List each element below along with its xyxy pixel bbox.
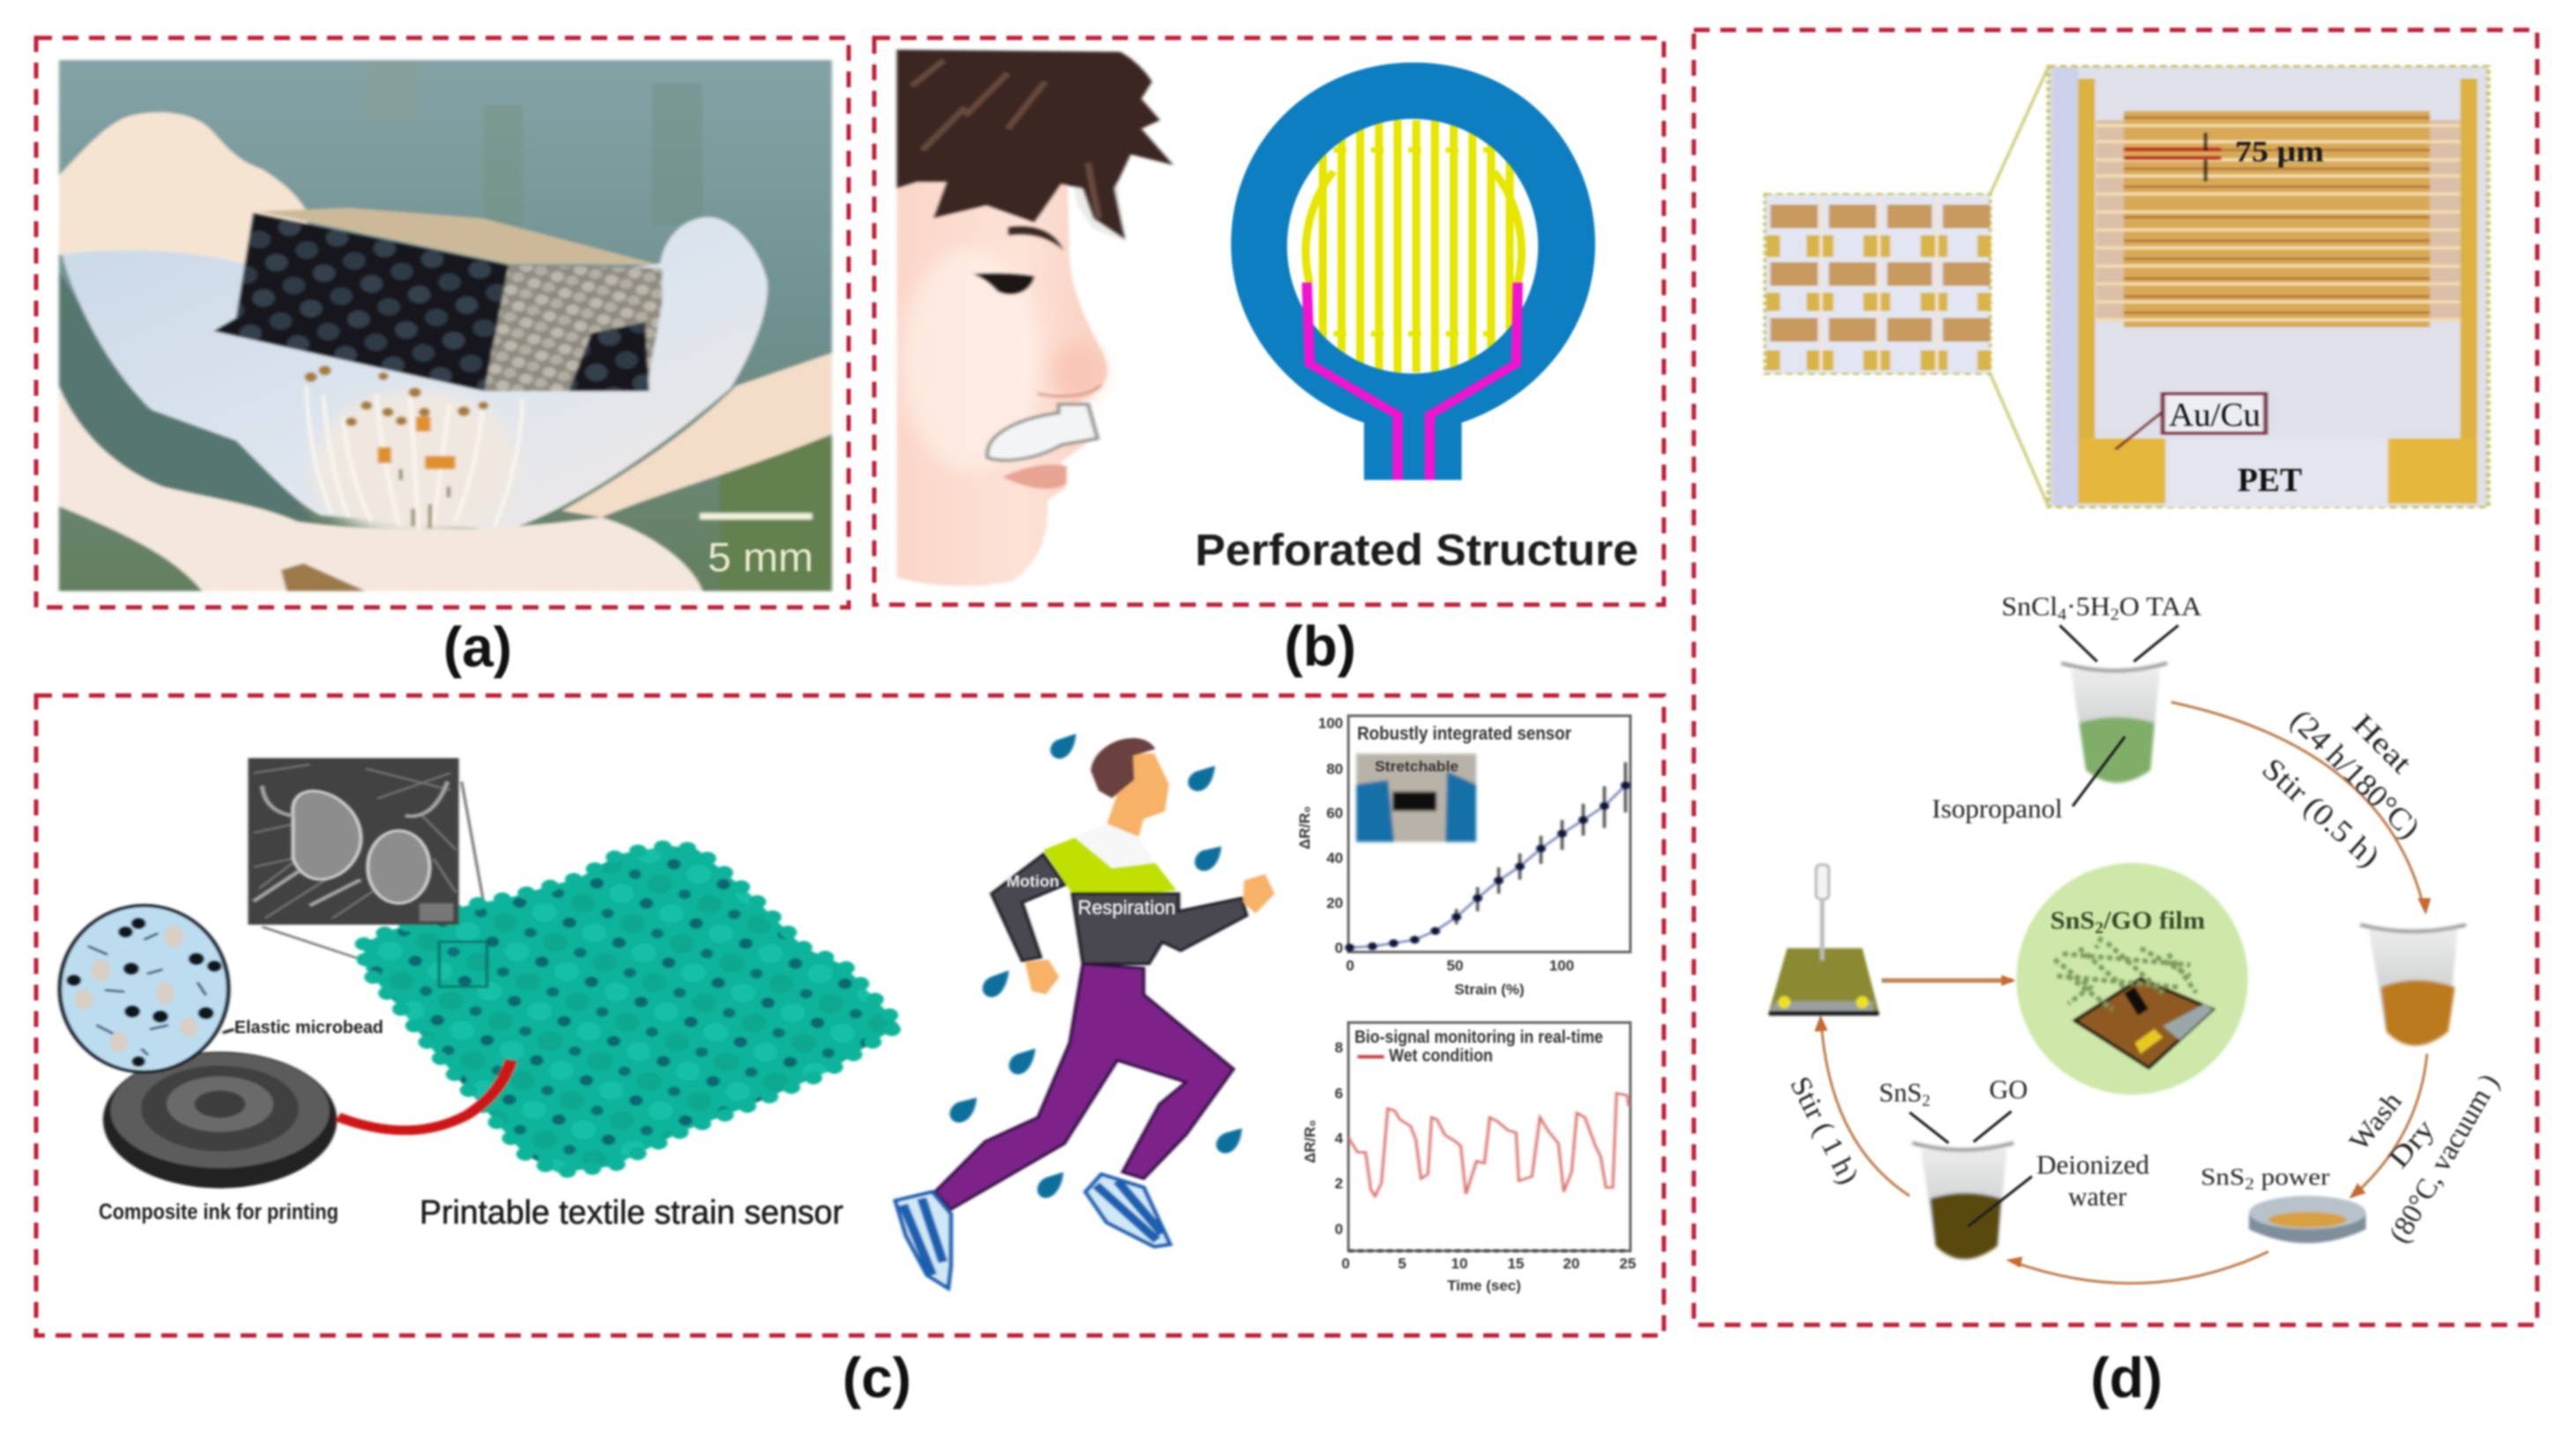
chart: bio-signal monitoring: Wet condition: [1389, 1046, 1493, 1066]
scale label: 5 mm: [708, 534, 813, 580]
illustration: runner with sweat drops: [895, 733, 1274, 1288]
label (b): (b): [1284, 614, 1356, 678]
chart: resistance vs strain: 20: [1326, 895, 1343, 911]
cycle text: 2: [2245, 1175, 2254, 1194]
chart: resistance vs strain: Strain (%): [1454, 981, 1525, 998]
panel: (c) printable textile strain sensor: [36, 695, 1664, 1335]
arrows: process cycle: [1821, 703, 2427, 1283]
dish: SnS2 powder: [2249, 1196, 2366, 1243]
signal trace: [1348, 1057, 1629, 1196]
cycle text: GO: [1989, 1075, 2028, 1105]
cycle text: Isopropanol: [1932, 793, 2062, 823]
chart: resistance vs strain: 40: [1326, 850, 1343, 867]
cycle text: 2: [1922, 1091, 1930, 1110]
cycle text: power: [2254, 1164, 2329, 1191]
chart: resistance vs strain: ΔR/R₀: [1296, 806, 1313, 850]
curve with error bars: [1345, 762, 1630, 951]
beaker: SnS2 and GO in water: [1912, 1143, 2014, 1259]
chart: resistance vs strain: 0: [1346, 957, 1355, 974]
chart: bio-signal monitoring: Time (sec): [1447, 1277, 1521, 1294]
cycle text: Dry: [2383, 1113, 2441, 1174]
chart: bio-signal monitoring: 20: [1563, 1255, 1579, 1272]
cycle text: (24 h/180°C): [2284, 703, 2427, 845]
cycle text: Stir (0.5 h): [2255, 751, 2387, 874]
cycle text: 2: [2111, 606, 2119, 624]
inset photo: [1356, 754, 1476, 842]
chart: bio-signal monitoring: 0: [1335, 1221, 1343, 1238]
caption: Perforated Structure: [1195, 525, 1638, 575]
chart: bio-signal monitoring: 10: [1451, 1255, 1467, 1272]
chart: resistance vs strain: 0: [1335, 940, 1343, 956]
label: PET: PET: [2238, 462, 2302, 499]
chart: resistance vs strain: 80: [1326, 761, 1343, 777]
cycle text: Wash: [2343, 1086, 2408, 1157]
diagram: synthesis cycle: [1769, 591, 2505, 1283]
cycle text: (80°C, vacuum ): [2383, 1068, 2505, 1248]
chart: bio-signal monitoring: ΔR/R₀: [1302, 1119, 1318, 1164]
illustration: ink, SEM inset and textile: [60, 758, 899, 1188]
cycle text: /GO film: [2103, 907, 2205, 935]
chart: bio-signal monitoring: 2: [1335, 1175, 1343, 1192]
panel: (d) SnS2/GO film sensor and synthesis: [1694, 30, 2537, 1325]
chart: resistance vs strain: 60: [1326, 805, 1343, 822]
cycle text: water: [2068, 1181, 2127, 1211]
chart: resistance vs strain: Robustly integrated sensor: [1357, 724, 1571, 744]
beaker: isopropanol solution: [2061, 663, 2167, 783]
label: motion: Motion: [1006, 873, 1059, 890]
illustration: sensor array and magnified electrode: [1765, 66, 2488, 507]
label (a): (a): [443, 615, 512, 679]
panel: (a) flower with textile sensor: [36, 38, 849, 607]
chart: bio-signal monitoring: Bio-signal monitoring in real-time: [1355, 1028, 1603, 1047]
chart: bio-signal monitoring: 6: [1335, 1085, 1343, 1102]
cycle text: Heat: [2346, 708, 2418, 780]
chart: bio-signal monitoring: [1302, 1023, 1636, 1294]
cycle text: [1784, 591, 2505, 1248]
cycle text: Stir ( 1 h): [1784, 1072, 1864, 1189]
photo: textile sensor resting on a flower: [59, 60, 832, 591]
label (d): (d): [2090, 1346, 2163, 1410]
beaker: heated solution: [2360, 925, 2466, 1045]
cycle text: O TAA: [2119, 591, 2201, 621]
cycle text: ·5H: [2067, 591, 2111, 621]
chart: resistance vs strain: Stretchable: [1375, 758, 1459, 775]
label: 75 micron gap: 75 μm: [2235, 136, 2324, 168]
cycle text: SnS: [1879, 1077, 1922, 1107]
chart: resistance vs strain: 100: [1549, 957, 1574, 974]
chart: bio-signal monitoring: 0: [1341, 1255, 1350, 1272]
chart: resistance vs strain: 100: [1318, 715, 1343, 732]
cycle text: SnS: [2201, 1164, 2240, 1191]
label: respiration: Respiration: [1078, 896, 1176, 919]
film result circle: [2016, 863, 2248, 1095]
chart: resistance vs strain: [1296, 715, 1630, 998]
panel: (b) nasal breath sensor: [874, 38, 1664, 605]
illustration: face profile with nasal sensor: [897, 49, 1173, 586]
chart: bio-signal monitoring: 4: [1335, 1130, 1344, 1147]
label: elastic microbead: Elastic microbead: [234, 1018, 383, 1038]
diagram: perforated sensor layout: [1231, 63, 1595, 480]
label (c): (c): [843, 1346, 911, 1410]
cycle text: 2: [2095, 919, 2104, 938]
cycle text: SnCl: [2001, 591, 2055, 621]
label: composite ink: Composite ink for printing: [99, 1200, 338, 1224]
chart: bio-signal monitoring: 25: [1620, 1255, 1636, 1272]
chart: bio-signal monitoring: 8: [1335, 1039, 1343, 1056]
label: Au/Cu: Au/Cu: [2169, 397, 2260, 434]
substrate with dropper: [1769, 865, 1879, 1015]
chart: bio-signal monitoring: 5: [1398, 1255, 1407, 1272]
small reagent arrows: [1910, 625, 2179, 1226]
cycle text: Deionized: [2037, 1149, 2149, 1179]
cycle text: SnS: [2051, 907, 2093, 935]
label: textile sensor: Printable textile strain sensor: [419, 1194, 843, 1231]
chart: resistance vs strain: 50: [1447, 957, 1463, 974]
cycle text: 4: [2058, 606, 2067, 624]
chart: bio-signal monitoring: 15: [1508, 1255, 1524, 1272]
